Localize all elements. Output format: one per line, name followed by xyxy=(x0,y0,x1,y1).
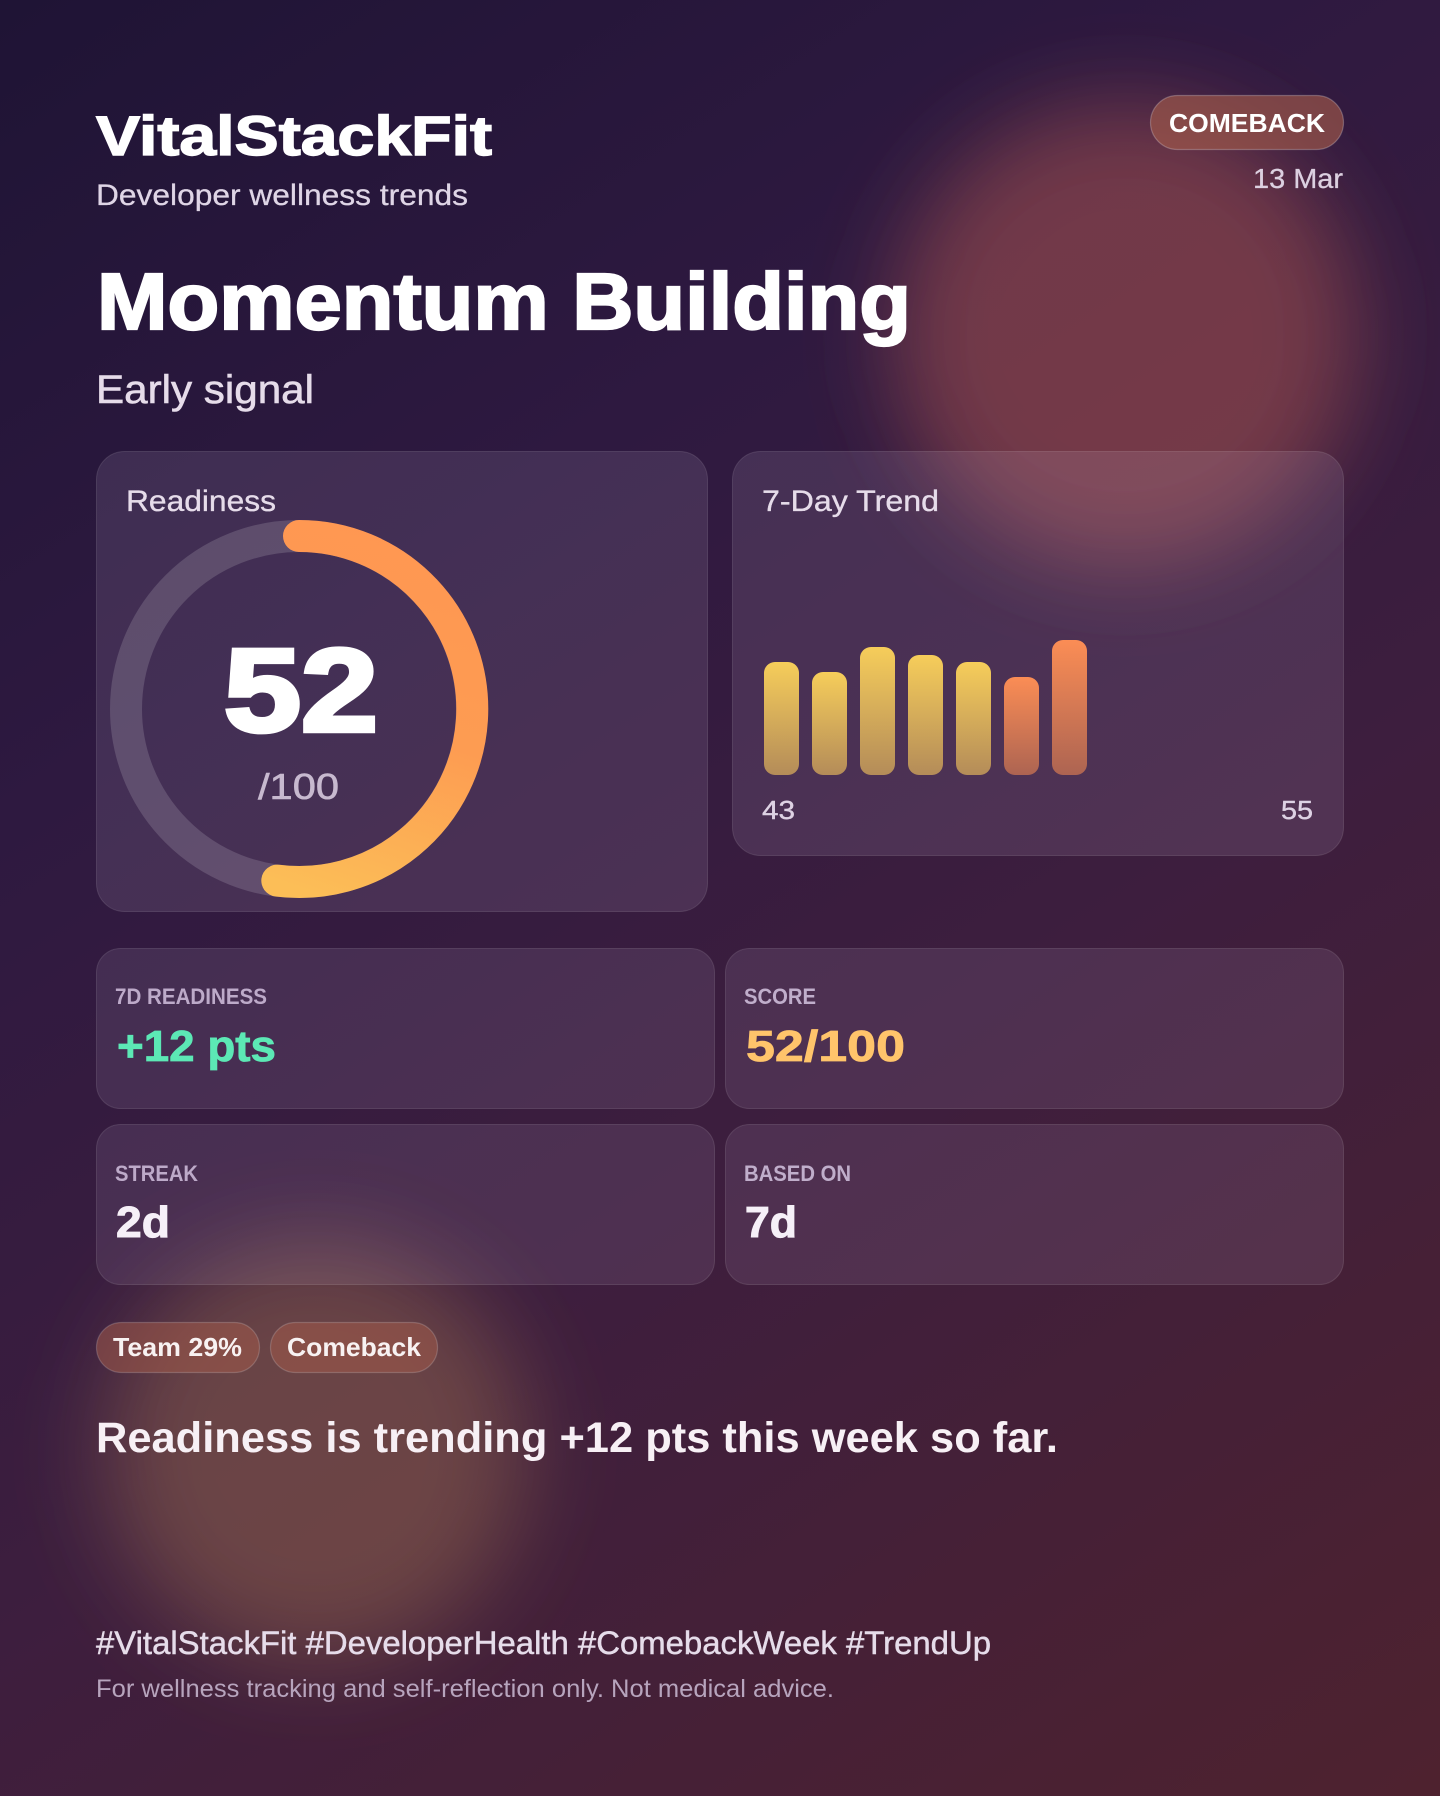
glow: top right xyxy=(893,103,1357,567)
stat: based on: BASED ON xyxy=(744,1161,851,1186)
stat: streak xyxy=(96,1124,714,1284)
tag: comeback xyxy=(270,1322,438,1372)
status badge xyxy=(1150,96,1344,150)
tag: team: Team 29% xyxy=(113,1332,242,1362)
panel: readiness xyxy=(96,452,708,912)
header xyxy=(96,96,1344,212)
brand tagline: Developer wellness trends xyxy=(96,179,468,212)
summary statement: Readiness is trending +12 pts this week so far. xyxy=(96,1414,1058,1462)
stat: based on: 7d xyxy=(745,1198,797,1247)
trend end value: 55 xyxy=(1281,795,1313,825)
glow: bottom left xyxy=(105,1240,525,1660)
status badge: COMEBACK xyxy=(1169,108,1325,138)
trend start value: 43 xyxy=(762,795,795,825)
tag: team xyxy=(96,1322,260,1372)
gauge scale: /100 xyxy=(258,766,339,807)
title: Momentum Building xyxy=(97,257,911,346)
hashtags: #VitalStackFit #DeveloperHealth #ComebackWeek #TrendUp xyxy=(96,1625,991,1661)
stat: score: 52/100 xyxy=(746,1022,905,1071)
disclaimer: For wellness tracking and self-reflection only. Not medical advice. xyxy=(96,1675,834,1703)
stat: based on xyxy=(726,1124,1344,1284)
stat: 7d readiness: +12 pts xyxy=(117,1022,276,1071)
gauge score: 52 xyxy=(224,625,378,757)
stat: streak: STREAK xyxy=(115,1161,198,1186)
stat: score: SCORE xyxy=(744,984,816,1009)
stat: streak: 2d xyxy=(116,1198,170,1247)
brand name: VitalStackFit xyxy=(96,104,492,167)
gauge ring xyxy=(126,536,472,882)
panel: 7-day trend xyxy=(732,452,1344,856)
bar chart xyxy=(764,640,1087,775)
stat: score xyxy=(726,948,1344,1108)
subtitle: Early signal xyxy=(96,368,314,412)
tag: comeback: Comeback xyxy=(287,1332,422,1362)
stat: 7d readiness: 7D READINESS xyxy=(115,984,267,1009)
date: 13 Mar xyxy=(1253,163,1343,194)
trend heading: 7-Day Trend xyxy=(762,485,939,518)
stat: 7d readiness xyxy=(96,948,714,1108)
readiness heading: Readiness xyxy=(126,485,276,518)
